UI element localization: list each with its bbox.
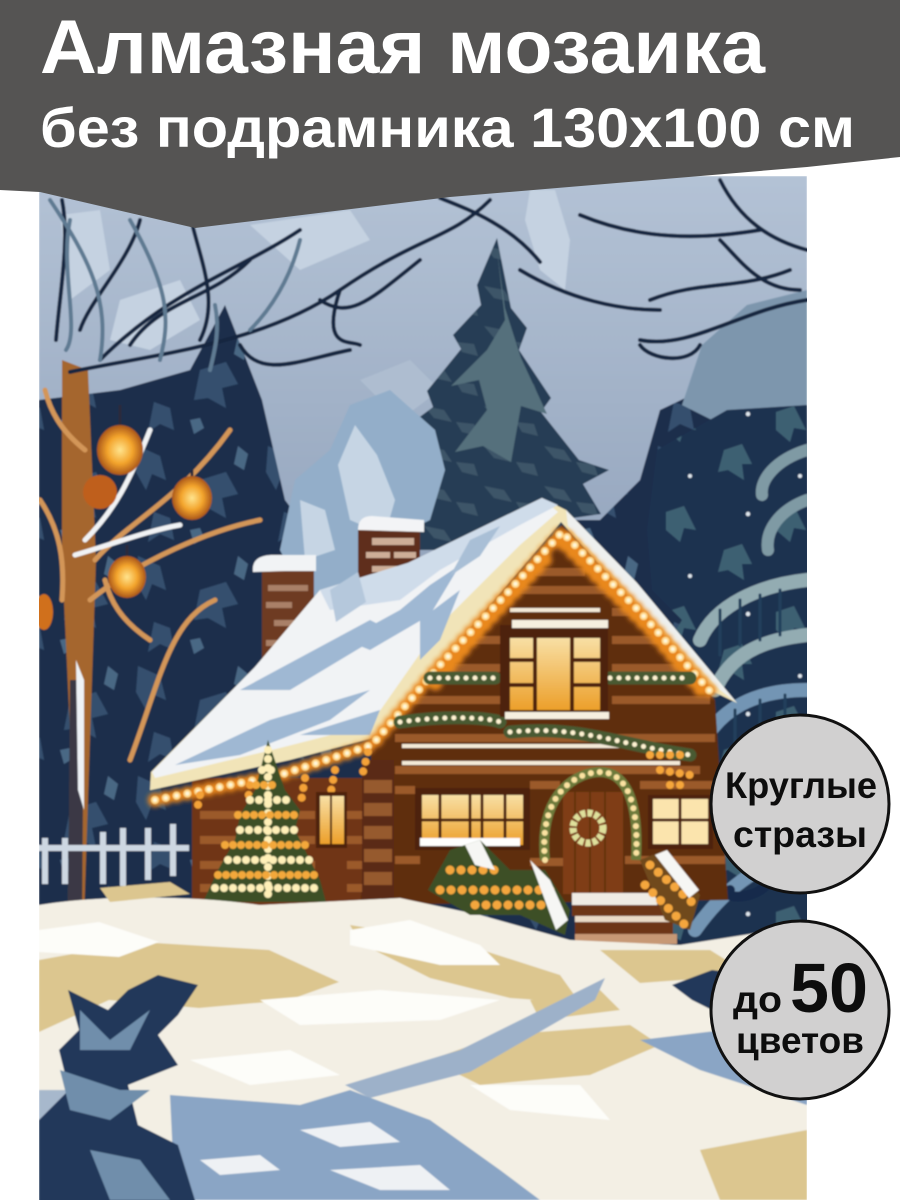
badge: up to 50 colors: цветов: [736, 1020, 864, 1061]
door wreath: [573, 813, 603, 843]
upper right foliage: [682, 290, 807, 425]
badge: round rhinestones: Круглые: [725, 765, 877, 806]
ground white highlights: [39, 920, 610, 1120]
title line 1: Алмазная мозаика: [40, 5, 766, 90]
cabin walls: [192, 525, 728, 910]
lower window: [415, 788, 530, 850]
small left window: [316, 792, 347, 848]
badge: round rhinestones: стразы: [733, 814, 867, 855]
central pine light side: [451, 250, 547, 462]
snowy roof: [150, 498, 737, 790]
header banner: [0, 0, 900, 228]
lanterns: [35, 405, 212, 630]
chimney left: [252, 554, 317, 658]
door garland lights: [544, 772, 637, 860]
door garland: [544, 772, 637, 860]
fence: [39, 824, 189, 886]
badge: up to 50 colors: [711, 921, 889, 1099]
left tree trunk: [62, 360, 96, 920]
garlands: [400, 678, 690, 785]
corner logs: [362, 760, 394, 910]
snow path highlights: [200, 1122, 450, 1190]
trunk dark side: [68, 680, 84, 920]
badge: up to 50 colors: до: [733, 979, 782, 1020]
chimney right: [357, 516, 426, 578]
right window: [648, 795, 713, 849]
central pine tree: [418, 238, 609, 551]
soft painted scene: [35, 176, 812, 1200]
trunk snow: [76, 660, 84, 810]
gable lights: [155, 532, 716, 805]
door: [563, 792, 623, 894]
background forest: [39, 304, 712, 946]
blue snow shadows: [39, 978, 807, 1200]
ground cream patches: [39, 882, 807, 1200]
badge: round rhinestones: [711, 715, 889, 893]
bushes: [428, 840, 700, 935]
ground snow: [39, 898, 807, 1200]
christmas tree: [203, 740, 326, 902]
sky clouds: [60, 190, 570, 420]
picture: winter cabin painting: [35, 176, 812, 1200]
steps: [572, 893, 677, 944]
chimney smoke: [280, 390, 445, 600]
sky: [39, 176, 807, 558]
right fir branches: [656, 404, 807, 941]
title line 2: без подрамника 130х100 см: [40, 96, 855, 159]
badge: up to 50 colors: 50: [790, 949, 868, 1027]
small pine bottom left: [39, 975, 198, 1200]
smoke highlight: [300, 425, 395, 560]
upper window: [500, 620, 609, 719]
bare branches: [40, 180, 807, 760]
fir branch by badge: [672, 970, 752, 1010]
title: [40, 5, 855, 159]
log stripes: [200, 572, 725, 888]
